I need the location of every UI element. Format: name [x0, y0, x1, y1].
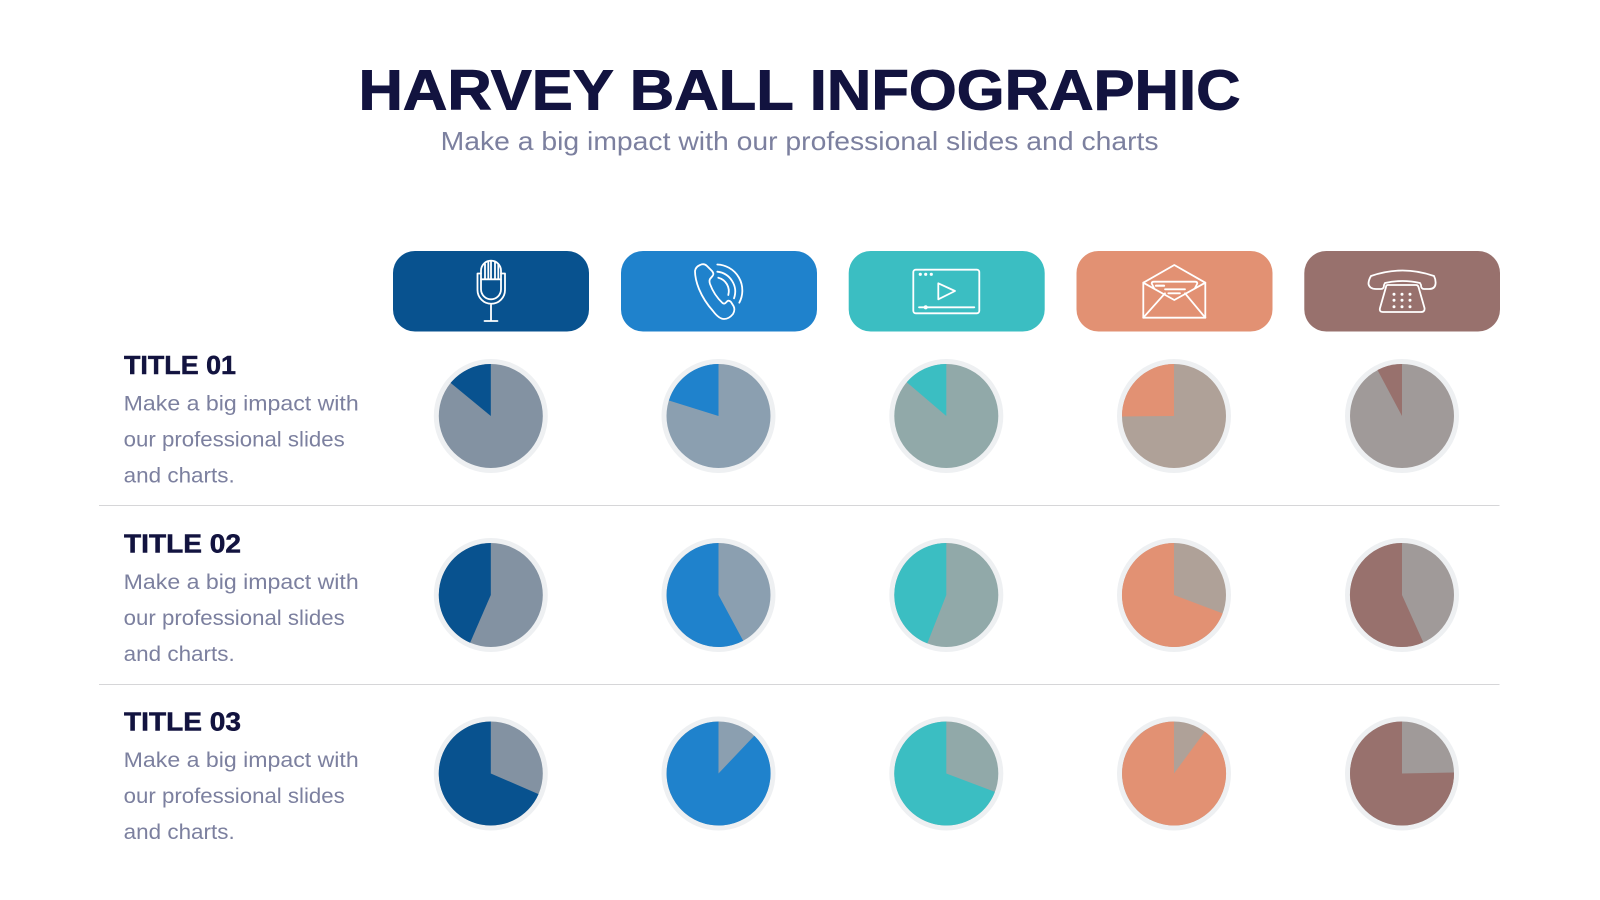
icon: phone call	[695, 264, 742, 319]
row 1 text: Make a big impact with	[124, 392, 359, 416]
row 3 text: TITLE 03	[124, 708, 241, 736]
title: HARVEY BALL INFOGRAPHIC	[358, 58, 1240, 122]
icon: telephone	[1368, 270, 1436, 312]
row 2 text: and charts.	[124, 642, 235, 666]
header: microphone column	[393, 251, 589, 332]
row 1 text: our professional slides	[124, 428, 345, 452]
icon: microphone	[478, 261, 505, 321]
row 2 text: Make a big impact with	[124, 570, 359, 594]
icon: video player	[913, 270, 979, 313]
row 1 text	[124, 352, 359, 488]
row 3 text: our professional slides	[124, 784, 345, 808]
row 2 harvey balls	[434, 538, 1459, 652]
row 2 text: our professional slides	[124, 606, 345, 630]
header: telephone column	[1304, 251, 1500, 332]
row 3 harvey balls	[434, 716, 1459, 830]
header: video column	[849, 251, 1045, 332]
row 1 text: TITLE 01	[124, 352, 236, 380]
header: mail column	[1076, 251, 1272, 332]
row 2 text: TITLE 02	[124, 530, 241, 558]
row 1 harvey balls	[434, 359, 1459, 473]
icon: envelope	[1143, 265, 1205, 318]
row 2 text	[124, 530, 359, 666]
row 3 text: and charts.	[124, 820, 235, 844]
subtitle: Make a big impact with our professional slides and charts	[441, 126, 1159, 156]
row 3 text: Make a big impact with	[124, 748, 359, 772]
row 1 text: and charts.	[124, 464, 235, 488]
header: phone call column	[621, 251, 817, 332]
row 3 text	[124, 708, 359, 844]
